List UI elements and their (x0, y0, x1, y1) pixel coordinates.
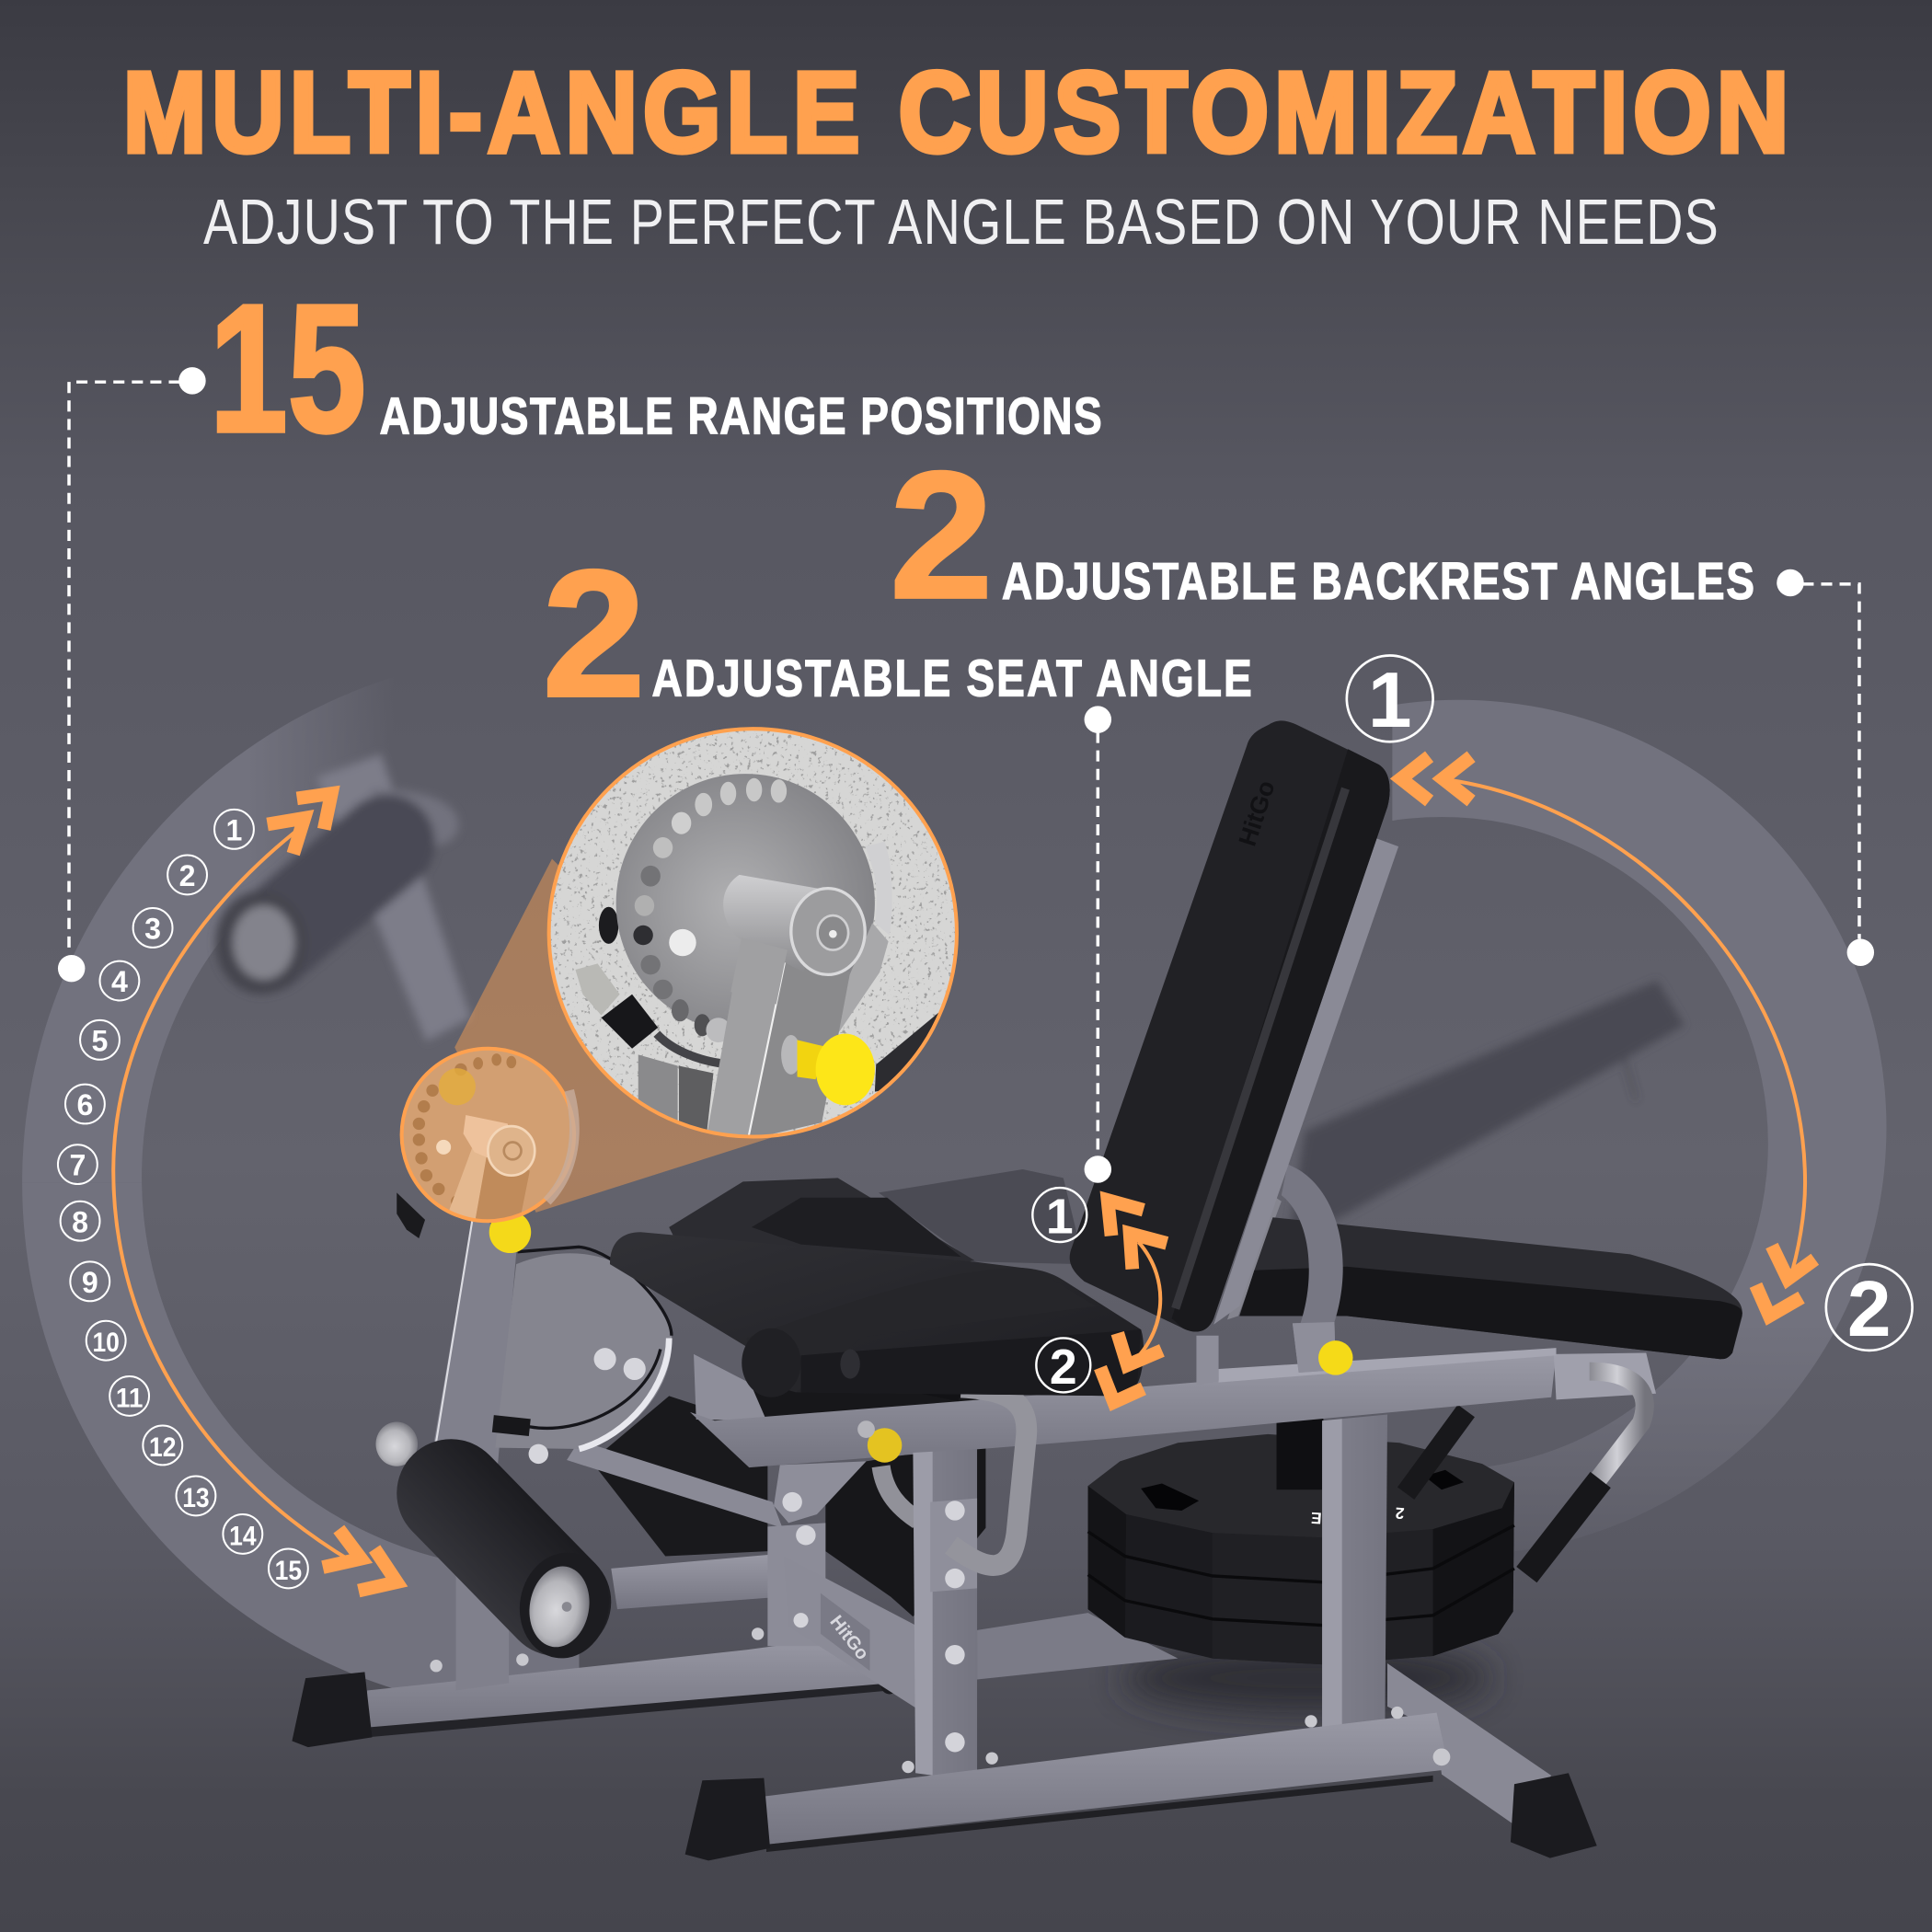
arrow: backrest arc (1401, 756, 1815, 1316)
frame crossbar diagonal (784, 1557, 915, 1708)
arm small (449, 1148, 486, 1218)
position number sequence: 3 (144, 913, 161, 946)
upper rail (1219, 1348, 1557, 1383)
weight stack top (1088, 1434, 1514, 1537)
socket bolt (818, 915, 848, 950)
ghost reclined backrest (1288, 981, 1685, 1245)
indexing disk (616, 774, 875, 1032)
base bolts (430, 1627, 1450, 1773)
thigh pad front face (747, 1268, 1097, 1392)
callout: 15 adjustable range positions: 15 (210, 268, 366, 471)
pin collar (857, 1420, 875, 1438)
position number sequence: 10 (92, 1328, 120, 1358)
pin collar (781, 1035, 801, 1075)
black knob behind disk (599, 907, 618, 944)
magnifier cone (454, 858, 820, 1213)
callout: 2 adjustable seat angle: 2 (542, 533, 646, 735)
arrow: leg range arc (113, 793, 397, 1591)
re-draw arm top (730, 937, 788, 1005)
roller cap (512, 1546, 617, 1665)
callout: 2 adjustable backrest angles: 2 (890, 434, 993, 637)
leg roller axle (375, 1422, 418, 1466)
backrest bevel (1176, 788, 1345, 1308)
right arm side (750, 963, 850, 1135)
weight horn (1277, 1417, 1323, 1489)
callout: 15 adjustable range positions (210, 268, 1102, 471)
front left foot (685, 1778, 770, 1860)
front base shadow (766, 1776, 1433, 1852)
leader line: range positions (58, 367, 206, 982)
weight front facet (1213, 1529, 1433, 1664)
rear left foot (292, 1672, 372, 1747)
leader line: backrest angles (1777, 569, 1874, 966)
weight holes (1141, 1470, 1464, 1511)
callout: 2 adjustable seat angle: ADJUSTABLE SEAT ANGLE (651, 649, 1252, 707)
roller metal end (523, 1561, 595, 1652)
pivot plate (495, 1253, 672, 1449)
seat bracket front (1293, 1322, 1336, 1373)
black frame corner (874, 1012, 938, 1092)
rear base beam (367, 1633, 890, 1730)
rear crossbar (611, 1554, 780, 1609)
left handle tube (951, 1387, 1027, 1566)
seat bracket right (1293, 1322, 1336, 1373)
cable (499, 1247, 672, 1428)
lower legs (638, 1054, 678, 1121)
backrest strut (1227, 1196, 1282, 1319)
weight right facet (1433, 1482, 1514, 1656)
seat position 1: 1 (1046, 1190, 1074, 1245)
right handle tube (1590, 1372, 1645, 1481)
cable clip (492, 1415, 531, 1436)
weight left facet (1088, 1486, 1126, 1638)
guide arc (657, 1034, 720, 1064)
centre floor beam (977, 1613, 1178, 1679)
pivot pin small (464, 1115, 508, 1157)
leader line: seat angle (1085, 706, 1111, 1183)
thigh pad lower face (801, 1329, 1141, 1396)
yellow pin, seat (868, 1428, 902, 1463)
front post (913, 1449, 977, 1782)
arm highlight (436, 1207, 475, 1442)
yellow pin, arm (489, 1212, 531, 1253)
bolt small (504, 1143, 522, 1159)
ghost seat pad (879, 1169, 1085, 1264)
back seat pad (1239, 1217, 1742, 1359)
weight horn handle (1406, 1410, 1466, 1493)
position number sequence (58, 810, 308, 1588)
arm edge (748, 950, 788, 1140)
position number sequence: 7 (69, 1149, 86, 1182)
seat position 2 (1036, 1338, 1090, 1395)
right black grip (1526, 1479, 1601, 1575)
magnified pivot, small circle (402, 1049, 574, 1232)
title: MULTI-ANGLE CUSTOMIZATION (123, 49, 1788, 176)
disk holes small (413, 1053, 516, 1207)
seat bracket left (1196, 1336, 1219, 1385)
seat base block (669, 1178, 974, 1282)
lower tube (881, 1466, 918, 1521)
position number sequence: 6 (76, 1088, 93, 1121)
bracket upright (767, 1523, 825, 1646)
range-of-motion band, right (1393, 699, 1886, 1505)
position number sequence: 14 (229, 1521, 257, 1551)
position number sequence: 4 (111, 965, 128, 998)
floor shadow (1121, 1644, 1491, 1713)
pivot boss small (488, 1126, 535, 1176)
post bolts (782, 1492, 965, 1752)
position number sequence: 13 (182, 1483, 210, 1513)
curved support (1282, 1165, 1343, 1328)
seat position 2: 2 (1050, 1340, 1077, 1395)
center hole (669, 929, 696, 956)
position number sequence: 11 (116, 1383, 143, 1413)
subtitle: ADJUST TO THE PERFECT ANGLE BASED ON YOUR NEEDS (203, 187, 1719, 259)
front base beam (764, 1713, 1449, 1845)
callout: 2 adjustable backrest angles: ADJUSTABLE BACKREST ANGLES (1002, 551, 1754, 610)
rear post (1322, 1415, 1387, 1730)
position number sequence: 5 (92, 1024, 108, 1057)
thigh seat pad (610, 1232, 1144, 1396)
disk holes (633, 778, 787, 1036)
left grip cap (840, 1350, 860, 1379)
backrest logo: HitGo (1234, 777, 1281, 849)
front arm (706, 937, 788, 1140)
front right foot (1511, 1773, 1597, 1858)
lower leg dark (679, 1065, 714, 1130)
backrest position 1: 1 (1368, 656, 1412, 744)
plate edge (579, 1338, 669, 1449)
speckled backdrop (542, 720, 967, 1146)
callout: 15 adjustable range positions: ADJUSTABLE RANGE POSITIONS (379, 386, 1102, 444)
backrest pad (1070, 720, 1390, 1332)
ghost leg arm and roller (215, 754, 471, 1041)
cable ferrule (602, 995, 658, 1049)
under-seat shadow (752, 1386, 992, 1423)
thigh pad roll end (742, 1328, 801, 1397)
right diagonal foot beam (1387, 1663, 1551, 1824)
pivot bolts (529, 1348, 646, 1464)
plate seams (1088, 1525, 1514, 1626)
backrest position 2 (1826, 1264, 1913, 1353)
arm side small (476, 1157, 530, 1220)
ghost yellow small (439, 1068, 476, 1105)
magnified pivot, large circle (542, 720, 973, 1146)
rear stud (706, 1018, 727, 1042)
frame logo: HitGo (825, 1612, 872, 1664)
callout: 2 adjustable seat angle (542, 533, 1252, 735)
position number sequence: 9 (82, 1266, 98, 1299)
left black grip (853, 1365, 961, 1387)
back pad front face (1239, 1267, 1742, 1359)
position number sequence: 8 (72, 1205, 88, 1238)
backrest bracket (1213, 838, 1398, 1325)
black cover, left (592, 1396, 767, 1557)
crescent (865, 842, 892, 936)
cable bolt (575, 963, 620, 1016)
leg extension machine (292, 720, 1742, 1860)
seat block recess (752, 1198, 961, 1257)
position number sequence: 12 (149, 1432, 177, 1463)
lower brace (567, 1441, 782, 1528)
weight stack body (1088, 1482, 1514, 1664)
roller bolt (562, 1602, 571, 1612)
post plate (930, 1499, 977, 1592)
black cover, right (825, 1442, 985, 1616)
upper bearing (397, 1192, 425, 1238)
beam end plate (1554, 1353, 1656, 1399)
left bracket box (694, 1354, 767, 1420)
backrest side face (1172, 749, 1390, 1332)
lever arm (429, 1206, 516, 1478)
weight marking: E (1310, 1509, 1322, 1528)
callout: 2 adjustable backrest angles (890, 434, 1754, 637)
position number sequence: 2 (179, 859, 196, 892)
pivot pin (723, 875, 832, 972)
swing bracket (774, 1461, 867, 1523)
logo plate (821, 1593, 870, 1671)
pivot boss (791, 889, 865, 974)
rear upright (456, 1540, 509, 1691)
backrest position 2: 2 (1847, 1265, 1892, 1353)
crescent edge (547, 1090, 574, 1202)
yellow pin, back (1318, 1340, 1353, 1375)
range-of-motion band, left (22, 653, 1082, 1713)
wheel (881, 1677, 898, 1695)
weight marking number: 2 (1395, 1504, 1405, 1523)
position number sequence: 15 (275, 1556, 302, 1586)
position number sequence: 1 (226, 813, 242, 846)
leg roller (451, 1493, 557, 1602)
backrest position 1 (1347, 655, 1433, 744)
yellow pull knob stem (798, 1040, 823, 1079)
front top beam (690, 1353, 1557, 1467)
yellow pull knob (816, 1034, 875, 1105)
seat position 1 (1032, 1188, 1087, 1245)
arrow: seat angle arc (1100, 1200, 1167, 1402)
rear base underside (367, 1683, 890, 1737)
right lower plate (838, 923, 889, 1034)
